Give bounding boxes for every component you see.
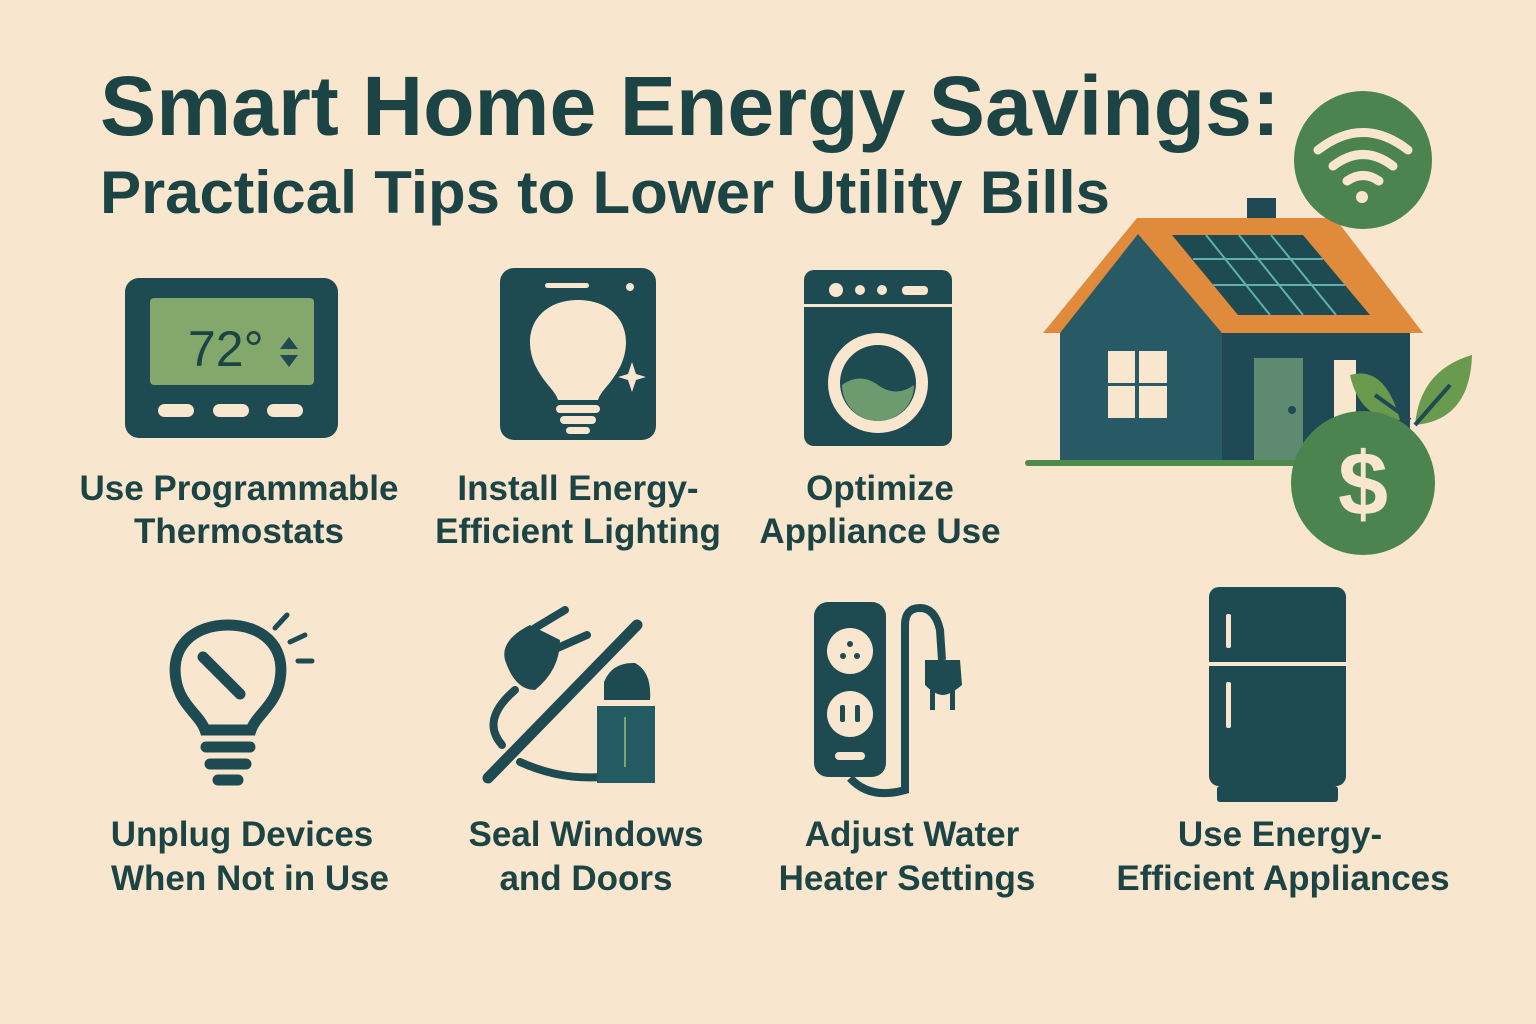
label: lighting bbox=[435, 469, 721, 551]
label: water heater: Heater Settings bbox=[779, 859, 1035, 898]
label: lighting: Install Energy- bbox=[457, 469, 699, 508]
icon: wifi circle bbox=[1294, 91, 1432, 229]
title: Practical Tips to Lower Utility Bills bbox=[100, 159, 1110, 226]
icon: dollar with leaves: $ bbox=[1338, 435, 1388, 535]
icon: bulb outline bbox=[175, 615, 312, 780]
label: appliances: Use Energy- bbox=[1178, 815, 1382, 854]
icon: thermostat: 72° bbox=[188, 321, 264, 377]
icon: power strip bbox=[814, 602, 962, 793]
title bbox=[100, 59, 1280, 226]
label: appliance use: Optimize bbox=[806, 469, 954, 508]
icon: fridge bbox=[1209, 587, 1346, 802]
icon: bulb tile bbox=[500, 268, 656, 440]
label: thermostats: Thermostats bbox=[134, 512, 344, 551]
label: appliances bbox=[1116, 815, 1450, 898]
label: lighting: Efficient Lighting bbox=[435, 512, 721, 551]
label: seal: Seal Windows bbox=[468, 815, 704, 854]
label: water heater bbox=[779, 815, 1035, 898]
illustration: smart house bbox=[1025, 198, 1423, 466]
label: appliance use bbox=[759, 469, 1001, 551]
label: seal bbox=[468, 815, 704, 898]
icon: seal plug bbox=[488, 610, 655, 783]
icon: washer bbox=[804, 270, 952, 446]
label: unplug: Unplug Devices bbox=[111, 815, 373, 854]
title: Smart Home Energy Savings: bbox=[100, 59, 1280, 153]
label: water heater: Adjust Water bbox=[805, 815, 1020, 854]
icon: dollar with leaves bbox=[1291, 355, 1472, 555]
label: appliance use: Appliance Use bbox=[759, 512, 1001, 551]
label: seal: and Doors bbox=[499, 859, 673, 898]
label: appliances: Efficient Appliances bbox=[1116, 859, 1450, 898]
label: thermostats: Use Programmable bbox=[79, 469, 399, 508]
icon: thermostat bbox=[125, 278, 338, 438]
label: unplug bbox=[111, 815, 389, 898]
label: unplug: When Not in Use bbox=[111, 859, 389, 898]
label: thermostats bbox=[79, 469, 399, 551]
